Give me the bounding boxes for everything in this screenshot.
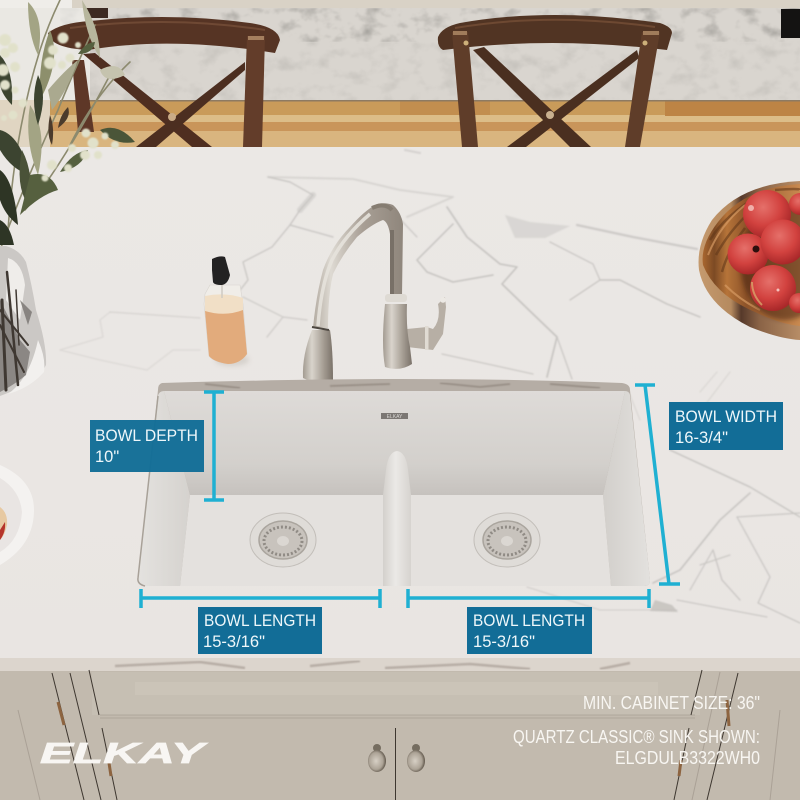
right length label (467, 607, 592, 654)
right drain (474, 513, 540, 567)
right wall (603, 391, 650, 586)
counter front edge (0, 658, 800, 671)
depth label: BOWL DEPTH (95, 427, 198, 445)
dimension: bowl depth (90, 392, 224, 500)
cabinet door lines (18, 670, 780, 800)
plate with apple slice (0, 465, 34, 565)
left length label: BOWL LENGTH (204, 612, 316, 630)
width label: 16-3/4" (675, 429, 728, 447)
right bowl floor (409, 495, 611, 586)
right knob (407, 744, 425, 772)
left knob (368, 744, 386, 772)
width label (669, 402, 783, 450)
dimension: left bowl length (141, 589, 380, 654)
elkay logo: ELKAY (40, 738, 209, 770)
right length label: BOWL LENGTH (473, 612, 585, 630)
plant (0, 0, 135, 250)
left length label (198, 607, 322, 654)
rim vein texture (205, 383, 600, 388)
cabinet size note: MIN. CABINET SIZE: 36" (583, 693, 760, 713)
faucet (303, 203, 446, 383)
right length label: 15-3/16" (473, 633, 535, 651)
left length label: 15-3/16" (203, 633, 265, 651)
left length arrow (141, 589, 380, 608)
chair left (48, 8, 280, 147)
fruit bowl (699, 181, 800, 340)
model note: ELGDULB3322WH0 (615, 748, 760, 768)
soap dispenser (204, 256, 249, 366)
background: wood floor (0, 100, 800, 147)
cabinet (0, 658, 800, 800)
model note: QUARTZ CLASSIC® SINK SHOWN: (513, 727, 760, 747)
sink rim (138, 379, 650, 586)
dimension: bowl width (635, 385, 783, 584)
sink (138, 379, 650, 586)
depth label: 10" (95, 448, 119, 466)
center divider (383, 451, 411, 586)
chair right (438, 15, 672, 147)
countertop (0, 147, 800, 660)
apples (728, 190, 800, 320)
marble veins (60, 150, 800, 623)
blossoms (0, 32, 119, 182)
dimension: right bowl length (408, 589, 649, 654)
back wall (164, 391, 625, 495)
left drain (250, 513, 316, 567)
width arrow (635, 385, 680, 584)
left wall (138, 391, 190, 586)
left bowl floor (180, 495, 383, 586)
depth arrow (204, 392, 224, 500)
leaves and stems (0, 0, 135, 250)
width label: BOWL WIDTH (675, 408, 777, 426)
model note (513, 727, 760, 768)
left edge shadow (138, 396, 158, 586)
right length arrow (408, 589, 649, 608)
dark object top right (781, 9, 800, 38)
depth label (90, 420, 204, 472)
small logo plate: ELKAY (387, 414, 403, 420)
vase (0, 246, 46, 396)
background: wall rug (0, 0, 800, 102)
small logo plate (381, 413, 408, 420)
